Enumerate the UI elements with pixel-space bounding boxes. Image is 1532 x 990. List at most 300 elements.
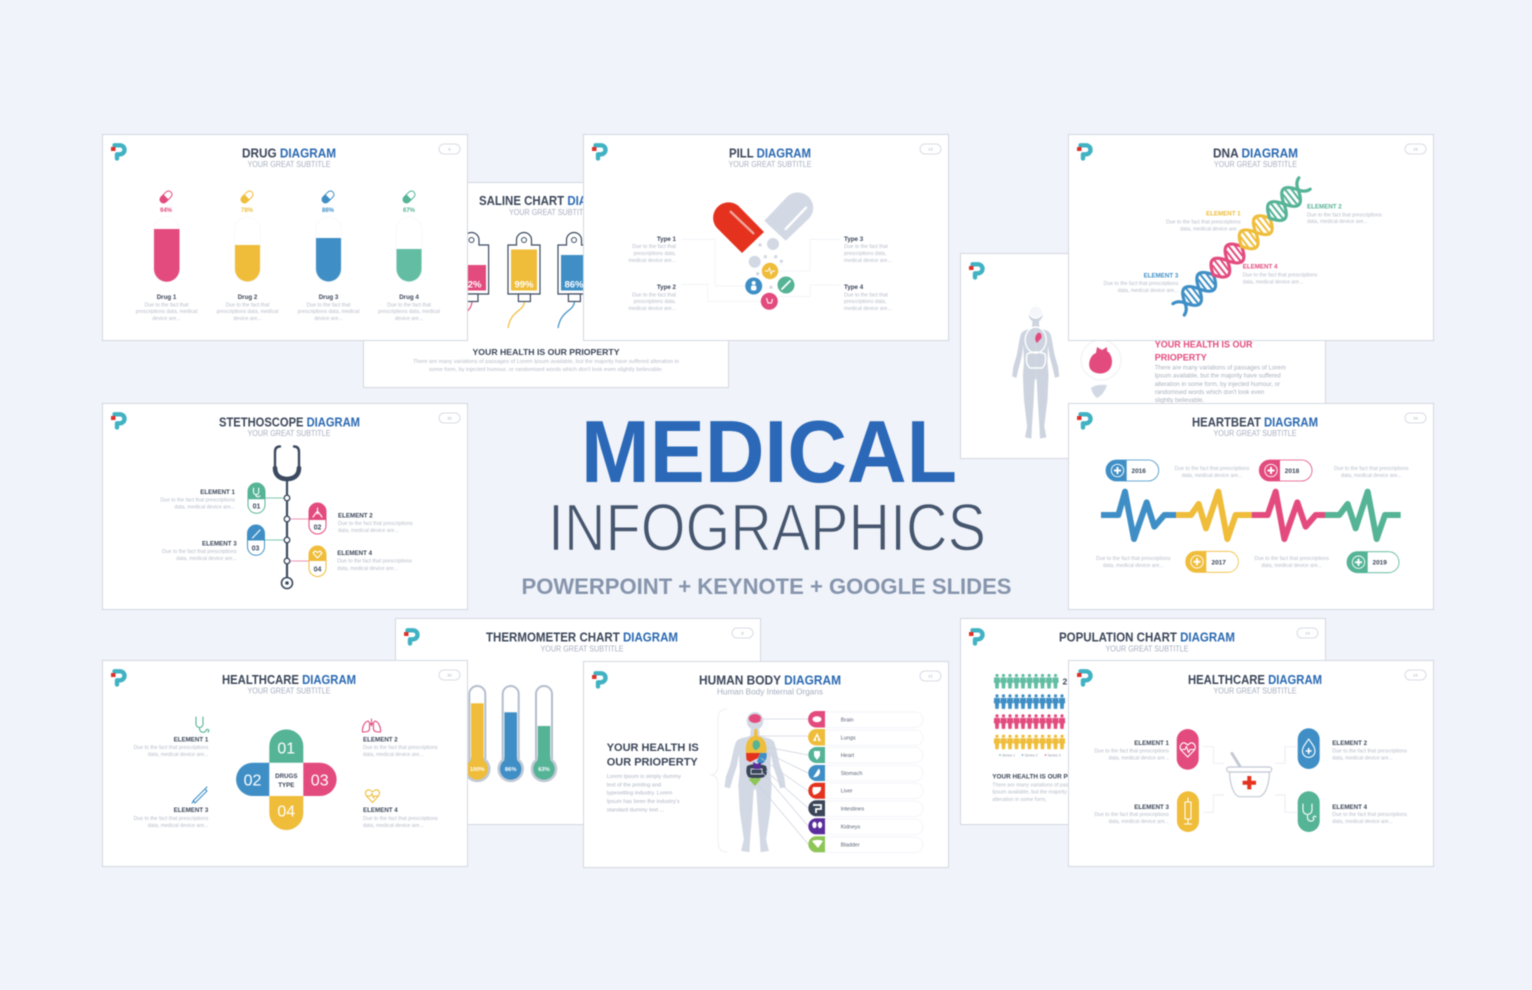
organ row: kidneys xyxy=(808,818,923,834)
type 1 text: medical device are... xyxy=(628,258,676,264)
connector lines xyxy=(1203,747,1297,812)
organ row: stomach xyxy=(808,765,923,781)
element 1: ELEMENT 1 xyxy=(1206,210,1241,218)
element 1: Due to the fact that prescriptions xyxy=(160,498,235,504)
drug 3 column: Due to the fact that xyxy=(307,302,351,308)
element 1: data, medical device are... xyxy=(148,752,208,758)
badge 2017 xyxy=(1186,551,1238,572)
element 3 xyxy=(134,807,209,829)
drug 1 column: Due to the fact that xyxy=(145,302,189,308)
element 1 xyxy=(1094,740,1170,761)
drug 1 column: prescriptions data, medical xyxy=(136,309,197,315)
element 2 xyxy=(1307,204,1382,225)
element 3: ELEMENT 3 xyxy=(202,541,237,548)
page number xyxy=(439,413,460,423)
element 4: Due to the fact that prescriptions xyxy=(1243,272,1318,278)
element 1: Due to the fact that prescriptions xyxy=(134,745,209,751)
element 4 xyxy=(363,807,438,829)
element 3: ELEMENT 3 xyxy=(174,807,209,814)
pill: water drop xyxy=(1298,728,1320,769)
type 1 text xyxy=(628,236,677,264)
DNA title: DNA DIAGRAM xyxy=(1213,146,1298,160)
cross segment 04: 04 xyxy=(277,804,295,820)
page number xyxy=(920,144,941,154)
drug 1 column: 94% xyxy=(160,208,173,214)
drug 3 column: Drug 3 xyxy=(319,294,339,301)
drug 2 column: Due to the fact that xyxy=(226,302,270,308)
left heading xyxy=(607,742,699,768)
badge 2019 xyxy=(1347,552,1399,573)
page number: 6 xyxy=(448,146,451,152)
heartbeat title: HEARTBEAT DIAGRAM xyxy=(1192,416,1318,430)
element 1: ELEMENT 1 xyxy=(174,736,209,744)
icon: yellow circle xyxy=(762,263,778,279)
panel: healthcare mortar diagram slide xyxy=(1068,660,1434,866)
population text block: There are many variations of passages of Lorem xyxy=(992,782,1104,788)
element 2: Due to the fact that prescriptions xyxy=(363,745,438,751)
element 3: data, medical device are... xyxy=(176,556,237,562)
organ paragraph: Ipsum available, but the majority have suffered xyxy=(1155,372,1281,380)
tab 04 xyxy=(309,546,326,576)
page number xyxy=(1405,670,1426,680)
icon: green circle xyxy=(778,276,794,294)
icon: big gray capsule half xyxy=(764,192,813,241)
tab 01: 01 xyxy=(253,504,260,510)
element 4: data, medical device are... xyxy=(1243,280,1303,286)
panel: DNA diagram slide xyxy=(1068,134,1434,340)
DNA helix xyxy=(1171,176,1312,317)
icon: heart xyxy=(366,790,379,802)
element 4: Due to the fact that prescriptions xyxy=(337,558,412,564)
page number xyxy=(1405,144,1426,154)
healthcare title: HEALTHCARE DIAGRAM xyxy=(1188,673,1322,687)
type 4 text: prescriptions data, xyxy=(844,299,886,305)
body silhouette xyxy=(1012,305,1059,439)
drug 4 column: prescriptions data, medical xyxy=(378,309,440,315)
page number: 21 xyxy=(928,674,933,678)
element 2 xyxy=(363,736,438,758)
heart badge xyxy=(1081,340,1121,380)
pill: heart xyxy=(1177,729,1199,770)
logo xyxy=(1077,145,1090,158)
drug 4 column: Due to the fact that xyxy=(387,302,431,308)
healthcare subtitle: YOUR GREAT SUBTITLE xyxy=(1214,686,1296,696)
badge 2019: 2019 xyxy=(1372,560,1387,567)
tab 03 xyxy=(248,525,264,555)
panel: healthcare cross diagram slide xyxy=(102,660,468,866)
page number xyxy=(1297,628,1318,638)
element 4 xyxy=(1243,264,1318,286)
thermometer 2 xyxy=(497,686,524,782)
organ row: brain xyxy=(808,711,923,728)
drug 4 column xyxy=(378,190,440,322)
type 1 text: Type 1 xyxy=(657,236,677,243)
population legend: Series 1 xyxy=(1002,753,1015,757)
heartbeat subtitle: YOUR GREAT SUBTITLE xyxy=(1214,429,1296,438)
icon: blue circle xyxy=(745,278,762,294)
organ row: liver xyxy=(808,783,923,799)
thermometer title: THERMOMETER CHART DIAGRAM xyxy=(486,630,678,644)
element 4: data, medical device are... xyxy=(337,566,398,572)
drug 1 column: Drug 1 xyxy=(157,294,177,301)
type 2 text: Type 2 xyxy=(657,284,677,291)
liver icon xyxy=(1091,385,1107,398)
element 4: ELEMENT 4 xyxy=(1243,264,1278,270)
type 3 text: medical device are... xyxy=(844,258,892,264)
badge 2018 xyxy=(1259,460,1312,481)
heartbeat captions: data, medical device are... xyxy=(1261,563,1322,569)
cross segment 01 xyxy=(269,729,303,763)
saline bag 2: 99% xyxy=(514,280,534,290)
logo xyxy=(404,630,418,644)
format tagline: POWERPOINT + KEYNOTE + GOOGLE SLIDES xyxy=(522,574,1012,599)
internal organs xyxy=(746,714,767,786)
population row green xyxy=(994,674,1068,688)
organ row: stomach: Stomach xyxy=(841,771,862,777)
healthcare subtitle: YOUR GREAT SUBTITLE xyxy=(248,686,330,696)
element 2: data, medical device are... xyxy=(363,752,424,758)
organ heading: PRIOPERTY xyxy=(1155,352,1207,362)
organ paragraph: randomised words which don't look even xyxy=(1155,389,1264,396)
saline bag 3: 86% xyxy=(564,280,584,290)
left paragraph: typesetting industry. Lorem xyxy=(607,791,673,797)
DNA subtitle: YOUR GREAT SUBTITLE xyxy=(1214,160,1297,169)
cross centre label xyxy=(275,773,297,789)
tab 03: 03 xyxy=(252,546,259,552)
page number: 14 xyxy=(1305,630,1310,636)
saline text block xyxy=(413,347,679,373)
left heading: OUR PRIOPERTY xyxy=(607,756,698,768)
element 3: Due to the fact that prescriptions xyxy=(134,816,209,822)
organ row: kidneys: Kidneys xyxy=(841,824,861,830)
drug 2 column: 78% xyxy=(241,208,254,214)
element 2: Due to the fact that prescriptions xyxy=(1307,212,1382,218)
population legend: Series 3 xyxy=(1048,753,1061,757)
drug 4 column: 67% xyxy=(403,208,416,214)
type 2 text xyxy=(628,284,677,312)
element 4 xyxy=(337,550,412,572)
population legend: Series 2 xyxy=(1024,753,1038,757)
element 2: ELEMENT 2 xyxy=(363,736,398,744)
badge 2016: 2016 xyxy=(1131,468,1146,475)
element 1: data, medical device are... xyxy=(1108,755,1169,761)
element 4: Due to the fact that prescriptions xyxy=(363,816,438,822)
page number: 30 xyxy=(447,672,452,678)
second heading: INFOGRAPHICS xyxy=(548,490,986,566)
population text block: YOUR HEALTH IS OUR PRIOPERTY xyxy=(992,774,1101,780)
element 2 xyxy=(338,512,413,534)
logo xyxy=(969,264,982,278)
element 1 xyxy=(134,736,209,758)
cross segment 03 xyxy=(303,763,337,796)
drug 2 column: prescriptions data, medical xyxy=(217,309,278,315)
panel: heartbeat diagram slide xyxy=(1068,404,1434,610)
tab 04: 04 xyxy=(314,566,321,574)
tab 01 xyxy=(248,483,265,513)
body silhouette xyxy=(724,712,786,852)
organ row: lungs xyxy=(808,729,923,746)
icon: syringe xyxy=(192,787,207,803)
element 3 xyxy=(1104,272,1179,294)
thermometer 3 xyxy=(531,686,557,782)
population legend xyxy=(999,753,1061,757)
page number: 13 xyxy=(928,146,933,152)
saline bag 3 xyxy=(558,232,590,328)
organ row: lungs: Lungs xyxy=(841,735,856,741)
organ row: intestines: Intestines xyxy=(841,806,864,812)
saline subtitle: YOUR GREAT SUBTITLE xyxy=(509,208,592,217)
left paragraph: Lorem Ipsum is simply dummy xyxy=(607,774,681,780)
heartbeat captions: data, medical device are... xyxy=(1341,473,1402,479)
saline text block: some form, by injected humour, or randomised words which don't look even slightly believable. xyxy=(429,367,663,373)
organ row: liver: Liver xyxy=(841,789,853,795)
page number: 16 xyxy=(1413,146,1418,152)
drug 1 column xyxy=(136,190,197,322)
type 4 text: Due to the fact that xyxy=(844,292,888,298)
element 3: ELEMENT 3 xyxy=(1144,272,1179,280)
organ row: heart: Heart xyxy=(841,753,855,759)
organ row: intestines xyxy=(808,800,923,816)
type 3 text xyxy=(844,236,892,264)
population row green: 2 xyxy=(1062,676,1068,686)
cross segment 02: 02 xyxy=(244,772,262,790)
element 1: ELEMENT 1 xyxy=(200,489,236,496)
human body subtitle: Human Body Internal Organs xyxy=(717,688,823,696)
pill subtitle: YOUR GREAT SUBTITLE xyxy=(728,160,812,169)
organ row: bladder: Bladder xyxy=(841,842,860,848)
page number xyxy=(920,671,941,681)
element 3: Due to the fact that prescriptions xyxy=(1104,281,1179,287)
heartbeat captions: Due to the fact that prescriptions xyxy=(1334,466,1409,472)
icon: pink circle xyxy=(761,293,778,310)
drug 3 column xyxy=(298,190,359,322)
panel: stethoscope diagram slide xyxy=(102,404,468,610)
drug 2 column: device are... xyxy=(233,316,262,322)
element 4: Due to the fact that prescriptions xyxy=(1332,812,1407,818)
drug 3 column: device are... xyxy=(314,316,343,322)
cross centre label: DRUGS xyxy=(275,773,297,780)
element 3: data, medical device are... xyxy=(148,823,208,829)
element 1: Due to the fact that prescriptions xyxy=(1094,748,1169,754)
stethoscope title: STETHOSCOPE DIAGRAM xyxy=(219,416,360,430)
population title: POPULATION CHART DIAGRAM xyxy=(1059,630,1235,644)
population subtitle: YOUR GREAT SUBTITLE xyxy=(1106,644,1188,654)
cross segment 02 xyxy=(236,763,269,796)
page number: 34 xyxy=(1413,416,1418,420)
element 2: data, medical device are... xyxy=(1307,219,1368,225)
drug subtitle: YOUR GREAT SUBTITLE xyxy=(248,160,330,169)
left paragraph: standard dummy text ... xyxy=(607,807,665,813)
drug 2 column: Drug 2 xyxy=(238,294,258,301)
population text block xyxy=(992,774,1104,803)
element 1: ELEMENT 1 xyxy=(1134,740,1170,747)
page number xyxy=(439,144,460,154)
left heading: YOUR HEALTH IS xyxy=(607,742,699,754)
logo xyxy=(111,671,124,684)
icon: lungs xyxy=(362,719,381,732)
population text block: alteration in some form, xyxy=(992,797,1047,803)
type 1 text: prescriptions data, xyxy=(634,251,676,257)
page number: 8 xyxy=(741,630,744,636)
logo xyxy=(592,673,606,686)
tab 02 xyxy=(309,503,326,534)
logo xyxy=(969,630,982,644)
element 4: ELEMENT 4 xyxy=(1332,804,1368,811)
thermometer 3: 63% xyxy=(538,767,550,773)
element 2: ELEMENT 2 xyxy=(1307,204,1342,210)
type 3 text: Due to the fact that xyxy=(844,244,888,250)
organ row: heart xyxy=(808,747,923,763)
connector lines xyxy=(682,239,840,301)
logo xyxy=(1077,671,1090,684)
heartbeat captions: data, medical device are... xyxy=(1103,563,1164,569)
element 2: data, medical device are... xyxy=(1332,755,1393,761)
cross segment 04 xyxy=(269,796,303,830)
element 3: Due to the fact that prescriptions xyxy=(162,549,237,555)
heartbeat line chart xyxy=(1101,492,1401,539)
saline bag 1 xyxy=(456,232,489,328)
saline text block: YOUR HEALTH IS OUR PRIOPERTY xyxy=(472,347,620,357)
drug 4 column: device are... xyxy=(395,316,423,322)
falling granules xyxy=(749,238,783,289)
element 3: Due to the fact that prescriptions xyxy=(1094,812,1169,818)
element 2: Due to the fact that prescriptions xyxy=(1332,748,1407,754)
element 3: ELEMENT 3 xyxy=(1134,804,1170,811)
cross segment 01: 01 xyxy=(277,740,295,758)
main heading: MEDICAL xyxy=(581,402,957,501)
badge 2016 xyxy=(1106,460,1159,481)
title xyxy=(522,402,1012,599)
type 4 text: medical device are... xyxy=(844,306,892,312)
type 2 text: Due to the fact that xyxy=(632,292,677,298)
pill: stethoscope xyxy=(1298,791,1320,832)
human body title: HUMAN BODY DIAGRAM xyxy=(699,674,841,688)
element 3 xyxy=(162,541,237,562)
element 3: data, medical device are... xyxy=(1108,819,1169,825)
population row blue xyxy=(994,694,1065,709)
panel: population chart slide xyxy=(960,618,1326,824)
panel: pill diagram slide xyxy=(584,134,948,340)
left paragraph: Ipsum has been the industry's xyxy=(607,799,680,805)
element 4: data, medical device are... xyxy=(363,823,424,829)
element 2: ELEMENT 2 xyxy=(338,512,373,520)
type 3 text: prescriptions data, xyxy=(844,251,886,257)
logo xyxy=(592,145,606,158)
type 1 text: Due to the fact that xyxy=(632,244,677,250)
element 4 xyxy=(1332,804,1407,825)
stethoscope subtitle: YOUR GREAT SUBTITLE xyxy=(248,429,330,438)
left paragraph: text of the printing and xyxy=(607,782,661,788)
tab 02: 02 xyxy=(314,524,321,532)
heart on body xyxy=(1035,333,1042,343)
panel: human body diagram slide xyxy=(584,662,948,868)
cross centre label: TYPE xyxy=(278,782,294,789)
icon: big red capsule half xyxy=(713,202,764,253)
logo xyxy=(111,145,124,158)
saline bag 1: 92% xyxy=(462,280,482,290)
page number xyxy=(732,628,753,638)
saline text block: There are many variations of passages of Lorem Ipsum available, but the majority have suffered alteration in xyxy=(413,359,679,365)
element 2: Due to the fact that prescriptions xyxy=(338,521,413,527)
population text block: Ipsum available, but the majority have suffered xyxy=(992,790,1100,796)
type 2 text: prescriptions data, xyxy=(634,299,676,305)
population row pink xyxy=(994,714,1065,729)
heartbeat captions: Due to the fact that prescriptions xyxy=(1096,556,1171,562)
organ row: bladder xyxy=(808,836,923,852)
panel: thermometer chart slide xyxy=(396,618,760,824)
type 2 text: medical device are... xyxy=(628,306,676,312)
element 2: data, medical device are... xyxy=(338,528,399,534)
page number: 32 xyxy=(447,416,452,420)
saline bag 2 xyxy=(508,232,540,328)
drug 1 column: device are... xyxy=(152,316,181,322)
pill: syringe xyxy=(1177,791,1199,832)
heartbeat captions: Due to the fact that prescriptions xyxy=(1175,466,1250,472)
thermometer 1: 100% xyxy=(470,767,485,773)
body organ outlines xyxy=(1025,306,1046,368)
organ paragraph: alteration in some form, by injected humour, or xyxy=(1155,381,1280,388)
drug 3 column: prescriptions data, medical xyxy=(298,309,359,315)
population row yellow xyxy=(994,735,1065,749)
logo xyxy=(111,414,124,428)
element 4: ELEMENT 4 xyxy=(363,807,398,814)
saline title: SALINE CHART DIAGRAM xyxy=(479,194,622,208)
badge 2018: 2018 xyxy=(1285,468,1300,475)
thermometer 2: 86% xyxy=(505,767,517,773)
organ leader lines xyxy=(757,719,808,844)
organ heading xyxy=(1155,340,1253,362)
heartbeat captions: Due to the fact that prescriptions xyxy=(1254,556,1329,562)
badge 2017: 2017 xyxy=(1211,559,1226,566)
panel: drug diagram slide xyxy=(102,134,468,340)
healthcare title: HEALTHCARE DIAGRAM xyxy=(222,673,356,687)
left paragraph xyxy=(607,774,681,813)
organ heading: YOUR HEALTH IS OUR xyxy=(1155,340,1253,350)
type 4 text xyxy=(844,284,892,312)
panel: human organ slide (back) xyxy=(960,254,1326,458)
thermometer 1 xyxy=(464,686,491,782)
panel: saline chart slide xyxy=(364,182,728,388)
page number: 19 xyxy=(1413,672,1418,678)
page number xyxy=(1405,413,1426,423)
bracket xyxy=(710,709,727,852)
organ paragraph xyxy=(1155,364,1286,404)
logo xyxy=(1077,414,1090,428)
icon: stethoscope xyxy=(275,446,299,588)
element 3: data, medical device are... xyxy=(1118,288,1178,294)
element 4: data, medical device are... xyxy=(1332,819,1393,825)
icon: stethoscope xyxy=(196,717,209,732)
element 2: ELEMENT 2 xyxy=(1332,740,1368,747)
drug title: DRUG DIAGRAM xyxy=(242,146,336,160)
element 3 xyxy=(1094,804,1170,825)
element 4: ELEMENT 4 xyxy=(337,550,373,557)
drug 2 column xyxy=(217,190,278,322)
drug 3 column: 86% xyxy=(322,208,335,214)
icon: mortar and pestle xyxy=(1227,754,1272,797)
element 1: Due to the fact that prescriptions xyxy=(1166,220,1241,226)
page number xyxy=(439,670,460,680)
type 3 text: Type 3 xyxy=(844,236,864,243)
organ paragraph: There are many variations of passages of Lorem xyxy=(1155,364,1286,371)
pill title: PILL DIAGRAM xyxy=(729,146,811,160)
element 1: data, medical device are... xyxy=(1180,226,1241,232)
element 2 xyxy=(1332,740,1407,761)
organ paragraph: slightly believable. xyxy=(1155,397,1204,404)
thermometer subtitle: YOUR GREAT SUBTITLE xyxy=(540,644,624,654)
cross segment 03: 03 xyxy=(311,772,329,790)
heartbeat captions: data, medical device are... xyxy=(1182,473,1242,479)
